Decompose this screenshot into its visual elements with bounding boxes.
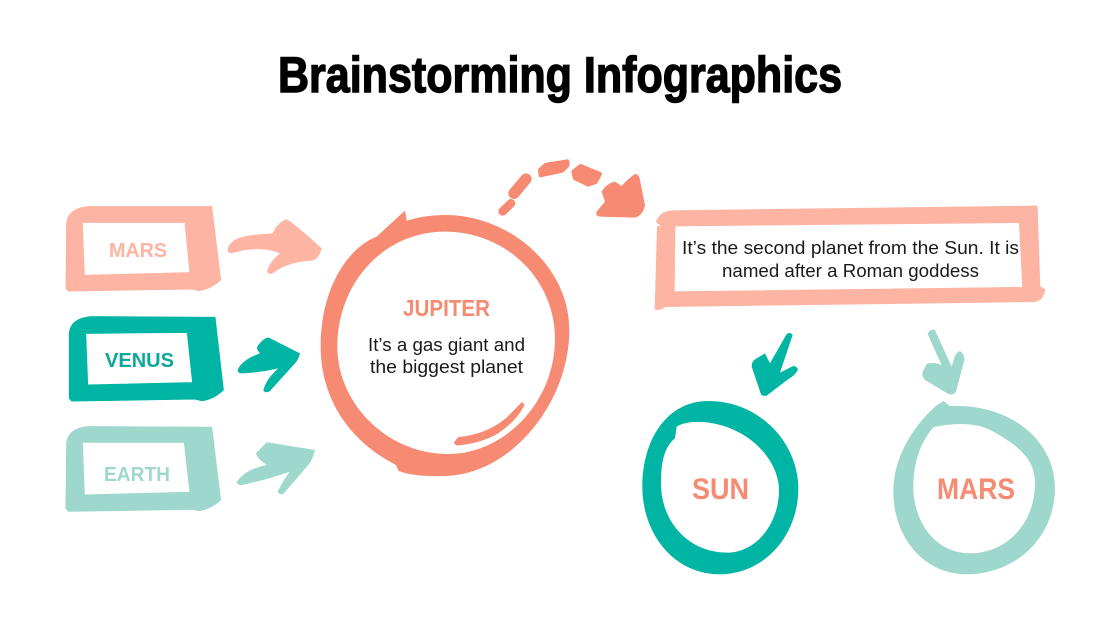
ring: Sun	[642, 401, 798, 574]
box: Earth	[66, 427, 221, 511]
label: Mars: MARS	[109, 239, 167, 262]
label: Venus: VENUS	[105, 349, 174, 372]
arrow: Mars to Jupiter	[228, 219, 322, 274]
arrow: callout to Sun	[752, 333, 798, 396]
callout frame	[655, 206, 1045, 310]
panel: Mars circle	[893, 401, 1055, 574]
panel: left input boxes	[66, 207, 223, 511]
text: callout description: named after a Roman goddess	[722, 260, 979, 281]
text: Jupiter description: the biggest planet	[370, 356, 523, 377]
box: Mars	[66, 207, 221, 291]
arrow: callout to Mars	[922, 330, 964, 395]
label: Sun: SUN	[692, 473, 749, 506]
text: Jupiter description	[368, 334, 525, 377]
box: Venus	[69, 317, 223, 401]
accent stroke inside ring	[454, 403, 524, 445]
text: callout description	[682, 237, 1019, 281]
ring: Jupiter	[321, 211, 569, 476]
title: Brainstorming Infographics	[278, 47, 842, 103]
ring: Mars	[893, 401, 1055, 574]
text: callout description: It’s the second planet from the Sun. It is	[682, 237, 1019, 258]
heading: Jupiter: JUPITER	[403, 295, 490, 321]
panel: Sun circle	[642, 401, 798, 574]
panel: description callout	[655, 206, 1045, 310]
label: Earth: EARTH	[104, 463, 170, 486]
arrow: Earth to Jupiter	[237, 442, 315, 494]
label: Mars: MARS	[937, 473, 1015, 506]
text: Jupiter description: It’s a gas giant and	[368, 334, 525, 355]
arrow: Venus to Jupiter	[238, 337, 300, 392]
panel: Jupiter circle	[321, 211, 569, 476]
arrow: dashed curve to callout	[503, 161, 645, 218]
